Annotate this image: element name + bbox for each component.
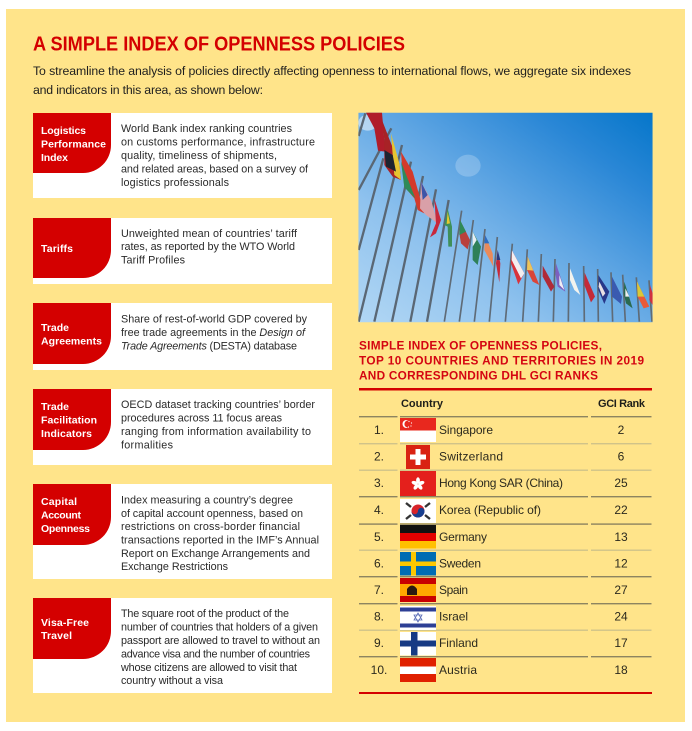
description: Tariffs: Tariff Profiles: [121, 254, 186, 266]
description: Tariffs: [121, 228, 298, 266]
label tab: Trade Agreements: Trade: [41, 322, 69, 334]
flag: Austria: [400, 658, 436, 682]
row: Finland: [374, 632, 628, 656]
row: Sweden: Sweden: [439, 556, 481, 570]
row: Germany: Germany: [439, 530, 487, 544]
row: Spain: [374, 578, 628, 602]
row: Korea: 22: [614, 503, 628, 517]
row: Singapore: 2: [618, 423, 625, 437]
table title: [359, 338, 644, 382]
panel: Visa-Free Travel: [33, 598, 332, 693]
row: Spain: 7.: [374, 583, 384, 597]
panel: Trade Agreements: [33, 303, 332, 370]
label tab: Trade Facilitation Indicators: [33, 389, 111, 450]
description: Logistics Performance Index: quality, timeliness of shipments,: [121, 150, 277, 162]
row: Switzerland: 6: [618, 450, 625, 464]
row: Sweden: [374, 552, 628, 576]
row: Hong Kong: 3.: [374, 476, 384, 490]
row: Austria: [371, 658, 628, 682]
description: Capital Account Openness: [121, 494, 319, 573]
description: Visa-Free Travel: The square root of the product of the: [121, 608, 289, 620]
title: A SIMPLE INDEX OF OPENNESS POLICIES: [33, 34, 405, 56]
description: Trade Agreements: [121, 314, 308, 352]
row: Germany: 5.: [374, 530, 384, 544]
description: Logistics Performance Index: [121, 123, 315, 189]
row: Austria: 18: [614, 663, 628, 677]
row: Singapore: Singapore: [439, 423, 493, 437]
row: Finland: 17: [614, 636, 628, 650]
flag: Spain: [400, 578, 436, 602]
row: Korea: Korea (Republic of): [439, 503, 541, 517]
panel: Capital Account Openness: [33, 484, 332, 579]
label tab: Visa-Free Travel: Visa-Free: [41, 617, 89, 629]
row: Germany: [374, 525, 628, 548]
row: Singapore: [374, 418, 625, 442]
label tab: Visa-Free Travel: Travel: [41, 630, 72, 642]
label tab: Capital Account Openness: [33, 484, 111, 545]
row: Austria: Austria: [439, 663, 477, 677]
label tab: Logistics Performance Index: Index: [41, 152, 68, 164]
label tab: Trade Facilitation Indicators: Trade: [41, 401, 69, 413]
row: Israel: 24: [614, 610, 628, 624]
table header: [401, 398, 646, 410]
description: Visa-Free Travel: [120, 608, 320, 687]
label tab: Trade Facilitation Indicators: Facilitation: [41, 414, 97, 426]
label tab: Capital Account Openness: Account: [41, 510, 82, 522]
description: Visa-Free Travel: advance visa and the number of countries: [121, 648, 311, 660]
label tab: Trade Facilitation Indicators: Indicators: [41, 428, 92, 440]
panel: Trade Facilitation Indicators: [33, 389, 332, 465]
table header: GCI Rank: [598, 398, 646, 410]
description: Trade Facilitation Indicators: procedures across 11 focus areas: [121, 412, 283, 424]
table title: AND CORRESPONDING DHL GCI RANKS: [359, 368, 598, 382]
description: Capital Account Openness: restrictions on cross-border financial: [121, 521, 300, 533]
description: Capital Account Openness: transactions reported in the IMF’s Annual: [121, 534, 319, 546]
label tab: Tariffs: Tariffs: [41, 243, 73, 255]
label tab: Trade Agreements: [33, 303, 111, 364]
row: Hong Kong: 25: [614, 476, 628, 490]
flag: Sweden: [400, 552, 436, 576]
flag: Switzerland: [406, 445, 430, 469]
table: top 10 countries: [359, 388, 652, 694]
row: Singapore: 1.: [374, 423, 384, 437]
description: Tariffs: rates, as reported by the WTO World: [121, 241, 295, 253]
intro text: To streamline the analysis of policies directly affecting openness to international flows, we aggregate six indexes: [33, 64, 631, 78]
description: Capital Account Openness: of capital account openness, based on: [121, 508, 303, 520]
description: Logistics Performance Index: and related areas, based on a survey of: [121, 164, 309, 176]
description: Trade Agreements: free trade agreements in the Design of: [121, 327, 306, 339]
description: Trade Agreements: Trade Agreements (DESTA) database: [121, 340, 297, 352]
flag: Germany: [400, 525, 436, 548]
label tab: Logistics Performance Index: Logistics: [41, 125, 86, 137]
description: Trade Agreements: Share of rest-of-world GDP covered by: [121, 314, 308, 326]
row: Switzerland: Switzerland: [439, 450, 503, 464]
description: Trade Facilitation Indicators: [121, 399, 315, 452]
description: Trade Facilitation Indicators: formalities: [121, 440, 174, 452]
row: Hong Kong: Hong Kong SAR (China): [439, 476, 563, 490]
table header: Country: [401, 398, 444, 410]
description: Tariffs: Unweighted mean of countries’ tariff: [121, 228, 298, 240]
row: Switzerland: [374, 445, 625, 469]
label tab: Capital Account Openness: Capital: [41, 496, 77, 508]
flag: Hong Kong: [400, 471, 436, 496]
intro text: and indicators in this area, as shown below:: [33, 83, 263, 97]
label tab: Trade Agreements: Agreements: [41, 336, 102, 348]
flag: Singapore: [400, 418, 436, 442]
row: Korea: [374, 499, 628, 523]
table title: TOP 10 COUNTRIES AND TERRITORIES IN 2019: [359, 354, 644, 368]
row: Finland: 9.: [374, 636, 384, 650]
description: Capital Account Openness: Report on Exchange Arrangements and: [121, 548, 310, 560]
flag: Korea: [400, 499, 436, 523]
description: Visa-Free Travel: country without a visa: [121, 675, 223, 687]
panel: Tariffs: [33, 218, 332, 284]
row: Korea: 4.: [374, 503, 384, 517]
flag: Israel: [400, 606, 436, 630]
description: Capital Account Openness: Exchange Restrictions: [121, 561, 229, 573]
label tab: Logistics Performance Index: Performance: [41, 138, 106, 150]
table title: SIMPLE INDEX OF OPENNESS POLICIES,: [359, 338, 602, 352]
flag: Finland: [400, 632, 436, 656]
row: Spain: 27: [614, 583, 628, 597]
description: Trade Facilitation Indicators: OECD dataset tracking countries’ border: [121, 399, 315, 411]
row: Switzerland: 2.: [374, 450, 384, 464]
row: Spain: Spain: [439, 583, 468, 597]
description: Capital Account Openness: Index measuring a country’s degree: [121, 494, 293, 506]
label tab: Visa-Free Travel: [33, 598, 111, 659]
label tab: Capital Account Openness: Openness: [41, 523, 90, 535]
description: Logistics Performance Index: on customs performance, infrastructure: [121, 136, 315, 148]
row: Germany: 13: [614, 530, 628, 544]
row: Israel: Israel: [439, 610, 468, 624]
description: Logistics Performance Index: logistics professionals: [121, 177, 230, 189]
description: Visa-Free Travel: passport are allowed to travel to without an: [121, 635, 320, 647]
intro text: [33, 64, 631, 97]
row: Finland: Finland: [439, 636, 478, 650]
photo: flags against blue sky: [358, 113, 653, 322]
description: Visa-Free Travel: whose citizens are allowed to visit that: [120, 662, 297, 674]
description: Visa-Free Travel: number of countries that holders of a given: [121, 622, 318, 634]
description: Trade Facilitation Indicators: ranging from information availability to: [121, 426, 311, 438]
label tab: Logistics Performance Index: [33, 113, 111, 173]
row: Sweden: 12: [614, 556, 628, 570]
row: Hong Kong: [374, 471, 628, 496]
label tab: Tariffs: [33, 218, 111, 278]
row: Sweden: 6.: [374, 556, 384, 570]
row: Israel: 8.: [374, 610, 384, 624]
panel: Logistics Performance Index: [33, 113, 332, 198]
description: Logistics Performance Index: World Bank index ranking countries: [121, 123, 293, 135]
row: Israel: [374, 606, 628, 630]
row: Austria: 10.: [371, 663, 387, 677]
